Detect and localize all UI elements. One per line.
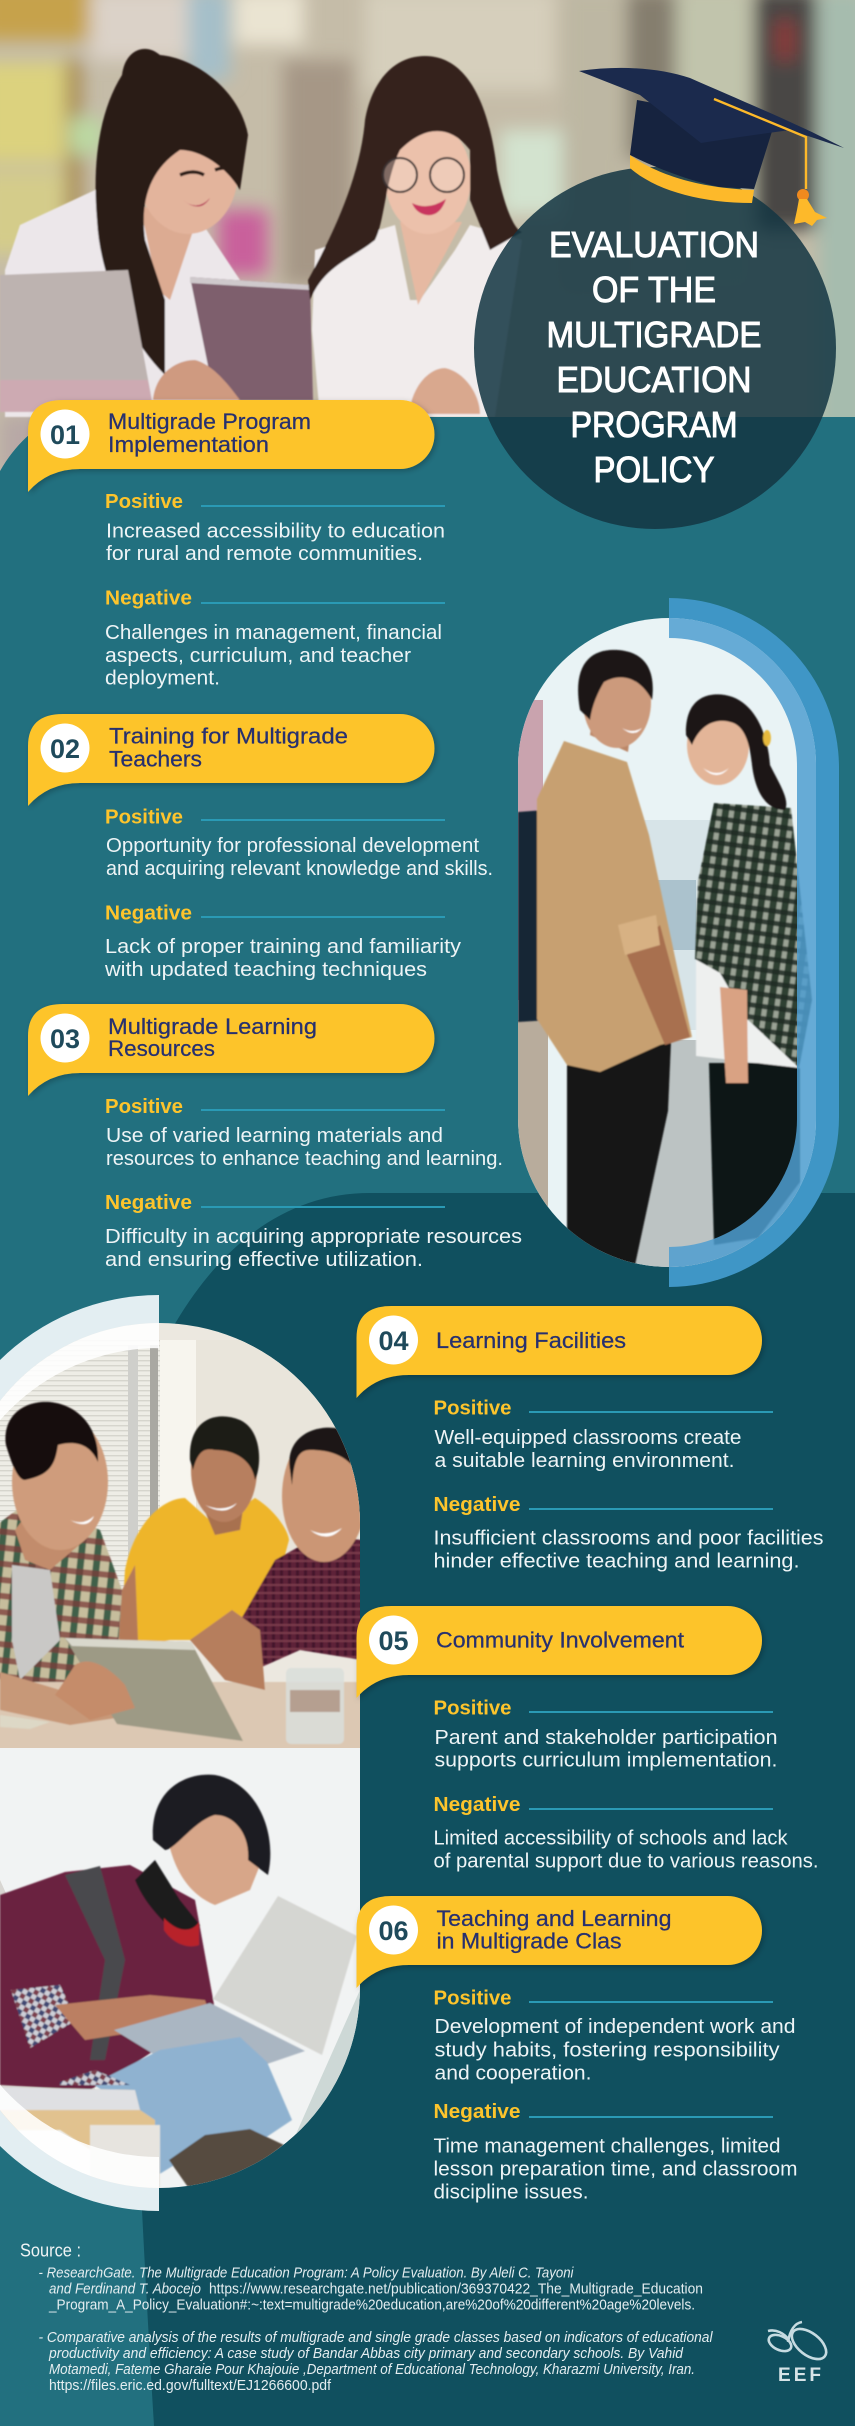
source block: - Comparative analysis of the results of multigrade and single grade classes based on indicators of educational <box>38 2329 713 2346</box>
shoe <box>169 2129 284 2190</box>
negative 06: Negative <box>434 2101 520 2123</box>
negative 05: Limited accessibility of schools and lack <box>434 1826 788 1850</box>
negative 04 <box>434 1494 824 1572</box>
banner 03: Multigrade Learning <box>108 1014 317 1039</box>
positive 05: Parent and stakeholder participation <box>434 1726 778 1749</box>
positive 02: and acquiring relevant knowledge and skills. <box>106 857 493 880</box>
banner 03: 03 <box>50 1024 80 1054</box>
banner 04 <box>356 1306 762 1398</box>
negative 05: of parental support due to various reasons. <box>434 1850 818 1872</box>
white translucent arc <box>0 1323 159 2188</box>
negative 02 <box>104 902 462 981</box>
head <box>168 1814 260 1906</box>
banner 01: 01 <box>50 420 80 450</box>
negative 02: Negative <box>105 902 192 924</box>
books <box>0 2088 156 2148</box>
negative 01: deployment. <box>105 666 220 690</box>
panel: 05 Community Involvement <box>356 1606 818 1872</box>
negative 05 <box>434 1794 818 1872</box>
positive 01: Increased accessibility to education <box>106 520 445 542</box>
positive 06: Development of independent work and <box>434 2015 796 2038</box>
jeans <box>93 2037 292 2175</box>
photo: three friends and student with laptop <box>0 1320 370 2198</box>
positive 06 <box>434 1988 796 2084</box>
banner 01: Implementation <box>108 432 269 457</box>
source block: and Ferdinand T. Abocejo <box>49 2280 201 2298</box>
negative 02: Lack of proper training and familiarity <box>105 935 462 958</box>
title: EDUCATION <box>556 359 752 400</box>
yellow tee friend <box>120 1498 289 1650</box>
banner 01 <box>28 400 434 492</box>
title: MULTIGRADE <box>546 314 762 355</box>
panel: left photo capsule <box>0 1295 370 2211</box>
negative 06: discipline issues. <box>434 2180 588 2204</box>
left woman <box>5 190 240 417</box>
negative 04: Negative <box>434 1494 520 1516</box>
laptop <box>213 1896 357 2055</box>
positive 03: resources to enhance teaching and learning. <box>106 1147 503 1170</box>
source block: https://www.researchgate.net/publication/369370422_The_Multigrade_Education <box>209 2280 703 2298</box>
positive 05: Positive <box>434 1698 512 1720</box>
banner 02 <box>28 714 434 806</box>
right woman <box>312 225 522 417</box>
title: POLICY <box>594 449 714 490</box>
positive 06: Positive <box>434 1988 512 2010</box>
positive 05: supports curriculum implementation. <box>434 1748 778 1772</box>
banner 01: Multigrade Program <box>108 409 311 434</box>
title: OF THE <box>592 269 716 310</box>
left friend <box>0 1500 122 1690</box>
source block: https://files.eric.ed.gov/fulltext/EJ1266600.pdf <box>49 2377 332 2394</box>
positive 02 <box>105 806 493 880</box>
banner 05: Community Involvement <box>436 1628 684 1652</box>
positive 03 <box>105 1096 503 1170</box>
title: PROGRAM <box>570 404 738 445</box>
negative 06: Time management challenges, limited <box>434 2134 780 2158</box>
positive 04 <box>434 1398 773 1472</box>
negative 03: and ensuring effective utilization. <box>105 1248 423 1271</box>
negative 01 <box>105 588 445 690</box>
negative 05: Negative <box>434 1794 520 1816</box>
positive 05 <box>434 1698 778 1772</box>
banner 02: 02 <box>50 734 80 764</box>
light blue arc <box>669 618 816 1267</box>
panel: student couple photo capsule <box>510 598 839 1287</box>
banner 04: Learning Facilities <box>436 1328 626 1353</box>
negative 04: hinder effective teaching and learning. <box>434 1550 800 1572</box>
icon: graduation cap <box>579 68 844 226</box>
right friend <box>242 1538 360 1668</box>
positive 01: Positive <box>105 491 183 513</box>
title: EVALUATION <box>549 224 759 265</box>
positive 04: Well-equipped classrooms create <box>434 1426 742 1449</box>
banner 02: Training for Multigrade <box>109 724 348 748</box>
source block: Motamedi, Fateme Gharaie Pour Khajouie ,Department of Educational Technology, Kharazmi University, Iran. <box>49 2361 695 2378</box>
positive 03: Use of varied learning materials and <box>106 1124 443 1147</box>
header photo: two students in library <box>0 0 855 480</box>
negative 01: Challenges in management, financial <box>105 621 442 644</box>
table <box>0 1682 365 1752</box>
negative 06 <box>434 2101 798 2204</box>
logo: EEF: EEF <box>778 2365 821 2386</box>
positive 01: for rural and remote communities. <box>106 542 423 565</box>
glass <box>286 1668 344 1744</box>
panel: 04 Learning Facilities <box>356 1306 824 1572</box>
woman <box>709 1063 800 1245</box>
banner 04: 04 <box>378 1326 409 1356</box>
man <box>567 1042 671 1265</box>
positive 04: Positive <box>434 1398 512 1420</box>
photo: two students <box>510 610 830 1280</box>
panel: 06 Teaching and Learning in Multigrade Clas <box>356 1896 798 2204</box>
banner 06: 06 <box>378 1916 409 1946</box>
banner 06: Teaching and Learning <box>436 1906 672 1931</box>
banner 05 <box>356 1606 762 1698</box>
positive 01 <box>105 491 445 565</box>
banner 06: in Multigrade Clas <box>436 1928 622 1954</box>
positive 02: Positive <box>105 806 183 828</box>
negative 03: Negative <box>105 1192 192 1214</box>
negative 02: with updated teaching techniques <box>104 958 427 981</box>
outer blue arc <box>669 598 839 1287</box>
source block: - ResearchGate. The Multigrade Education Program: A Policy Evaluation. By Aleli C. Tayoni <box>38 2264 574 2282</box>
panel: 01 Multigrade Program Implementation <box>28 400 445 690</box>
photo 2 background <box>0 1748 370 2198</box>
negative 03: Difficulty in acquiring appropriate resources <box>105 1225 522 1248</box>
panel: 03 Multigrade Learning Resources <box>28 1004 522 1271</box>
positive 06: study habits, fostering responsibility <box>434 2038 780 2062</box>
panel: 02 Training for Multigrade Teachers <box>28 714 493 981</box>
source block <box>20 2240 713 2394</box>
banner 02: Teachers <box>109 746 202 772</box>
title <box>546 224 762 490</box>
positive 03: Positive <box>105 1096 183 1118</box>
positive 02: Opportunity for professional development <box>106 834 479 857</box>
positive 06: and cooperation. <box>434 2062 592 2084</box>
negative 04: Insufficient classrooms and poor facilities <box>434 1526 824 1550</box>
negative 01: Negative <box>105 588 192 610</box>
negative 06: lesson preparation time, and classroom <box>434 2158 798 2180</box>
positive 04: a suitable learning environment. <box>434 1449 734 1472</box>
pale outer arc <box>0 1295 159 2211</box>
negative 01: aspects, curriculum, and teacher <box>105 644 411 667</box>
source block: productivity and efficiency: A case study of Bandar Abbas city primary and secondary schools. By Vahid <box>48 2345 684 2362</box>
title circle <box>474 167 836 529</box>
dark lower background panel <box>135 1193 855 2426</box>
banner 05: 05 <box>378 1626 409 1656</box>
source block: Source : <box>20 2240 81 2260</box>
source block: _Program_A_Policy_Evaluation#:~:text=multigrade%20education,are%20of%20different%20age%20levels. <box>48 2296 695 2314</box>
tablet <box>65 1638 243 1741</box>
banner 03: Resources <box>108 1036 215 1061</box>
negative 03 <box>105 1192 522 1271</box>
banner 03 <box>28 1004 434 1096</box>
banner 06 <box>356 1896 762 1988</box>
logo: EEF <box>766 2322 832 2386</box>
